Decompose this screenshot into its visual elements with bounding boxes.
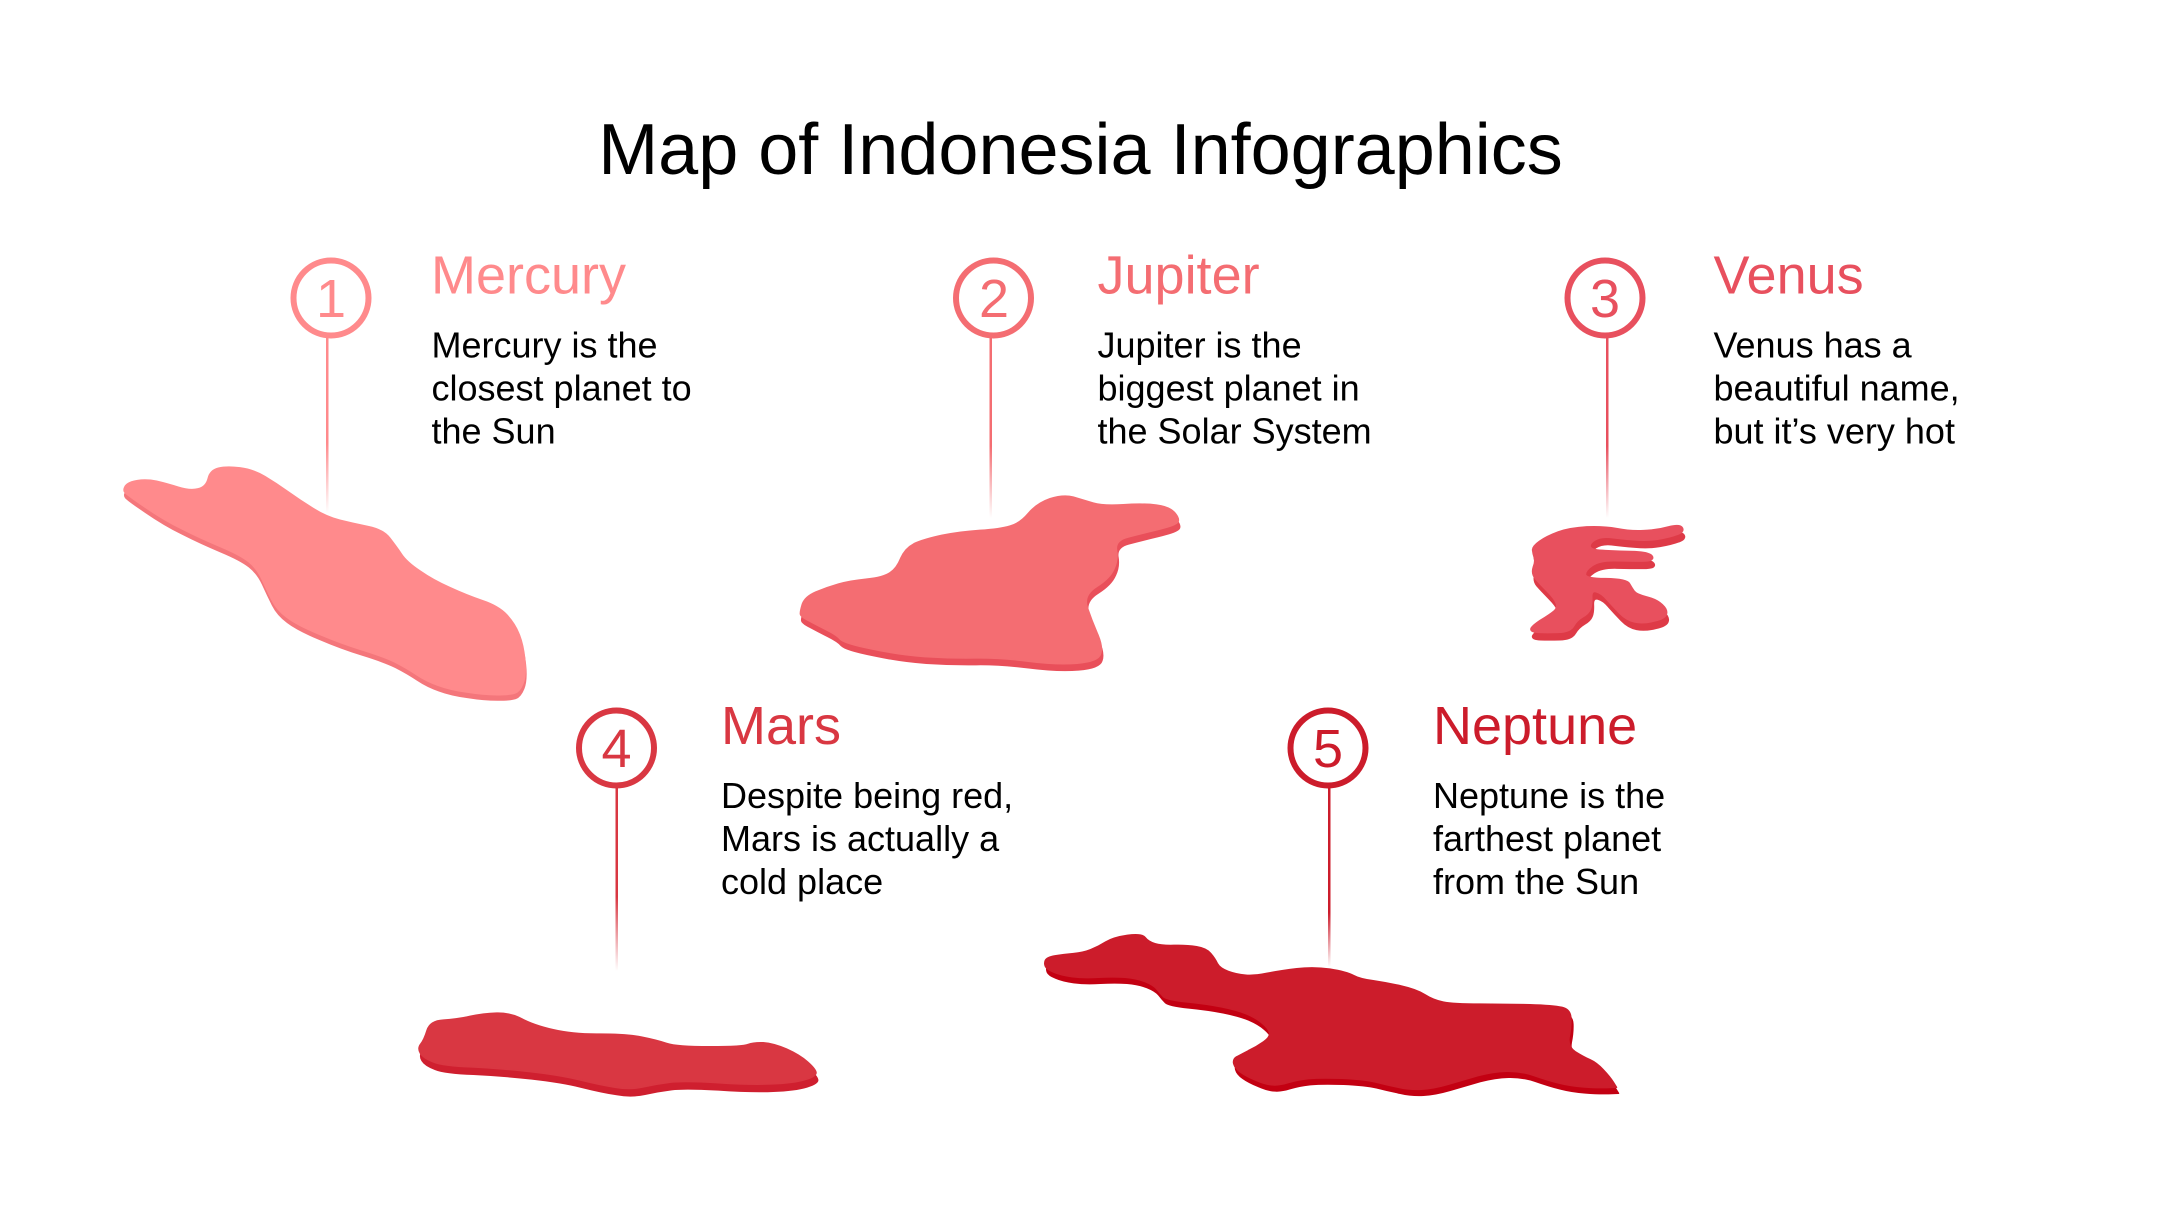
text: Jupiter description: the Solar System bbox=[1098, 410, 1372, 452]
heading: Mars: Mars bbox=[721, 696, 841, 756]
number 4: 4 bbox=[601, 719, 632, 779]
panel: Jupiter bbox=[800, 246, 1372, 671]
map: Mercury island bbox=[124, 467, 526, 700]
text: Mercury description: closest planet to bbox=[432, 368, 692, 408]
text: Venus description: Venus has a bbox=[1714, 324, 1913, 366]
map: Jupiter island bbox=[800, 496, 1180, 671]
pin line 4 bbox=[616, 785, 618, 971]
map: Venus island bbox=[1531, 526, 1684, 639]
heading: Mercury: Mercury bbox=[431, 246, 626, 306]
text: Mercury description: the Sun bbox=[432, 410, 556, 452]
text: Mars description: Despite being red, bbox=[721, 775, 1013, 816]
text: Neptune description: from the Sun bbox=[1433, 861, 1639, 902]
text: Jupiter description: biggest planet in bbox=[1098, 368, 1360, 408]
map: Neptune island bbox=[1045, 935, 1619, 1095]
text: Neptune description: farthest planet bbox=[1433, 818, 1661, 859]
panel: Mercury bbox=[124, 246, 692, 700]
heading: Neptune: Neptune bbox=[1433, 696, 1637, 756]
pin circle 3 bbox=[1568, 260, 1642, 336]
pin line 3 bbox=[1606, 338, 1608, 518]
panel: Mars bbox=[419, 696, 1013, 1096]
pin line 1 bbox=[326, 338, 328, 513]
map: Mars island bbox=[419, 1013, 818, 1096]
title: Map of Indonesia Infographics bbox=[598, 110, 1563, 190]
heading: Jupiter: Jupiter bbox=[1098, 246, 1260, 306]
text: Mars description: Mars is actually a bbox=[721, 818, 1000, 859]
number 2: 2 bbox=[979, 269, 1009, 329]
text: Venus description: beautiful name, bbox=[1714, 368, 1960, 408]
text: Venus description: but it’s very hot bbox=[1714, 410, 1955, 452]
number 3: 3 bbox=[1590, 269, 1620, 329]
pin line 2 bbox=[990, 338, 992, 518]
pin circle 4 bbox=[579, 710, 654, 786]
pin circle 1 bbox=[294, 260, 368, 336]
pin line 5 bbox=[1328, 785, 1330, 967]
panel: Venus bbox=[1531, 246, 1960, 639]
pin circle 5 bbox=[1290, 710, 1366, 786]
number 1: 1 bbox=[316, 269, 346, 329]
text: Jupiter description: Jupiter is the bbox=[1098, 324, 1302, 366]
number 5: 5 bbox=[1313, 719, 1343, 779]
text: Neptune description: Neptune is the bbox=[1433, 775, 1665, 816]
text: Mars description: cold place bbox=[721, 861, 883, 902]
text: Mercury description: Mercury is the bbox=[432, 324, 658, 366]
panel: Neptune bbox=[1045, 696, 1665, 1095]
heading: Venus: Venus bbox=[1714, 246, 1864, 306]
pin circle 2 bbox=[956, 260, 1031, 336]
